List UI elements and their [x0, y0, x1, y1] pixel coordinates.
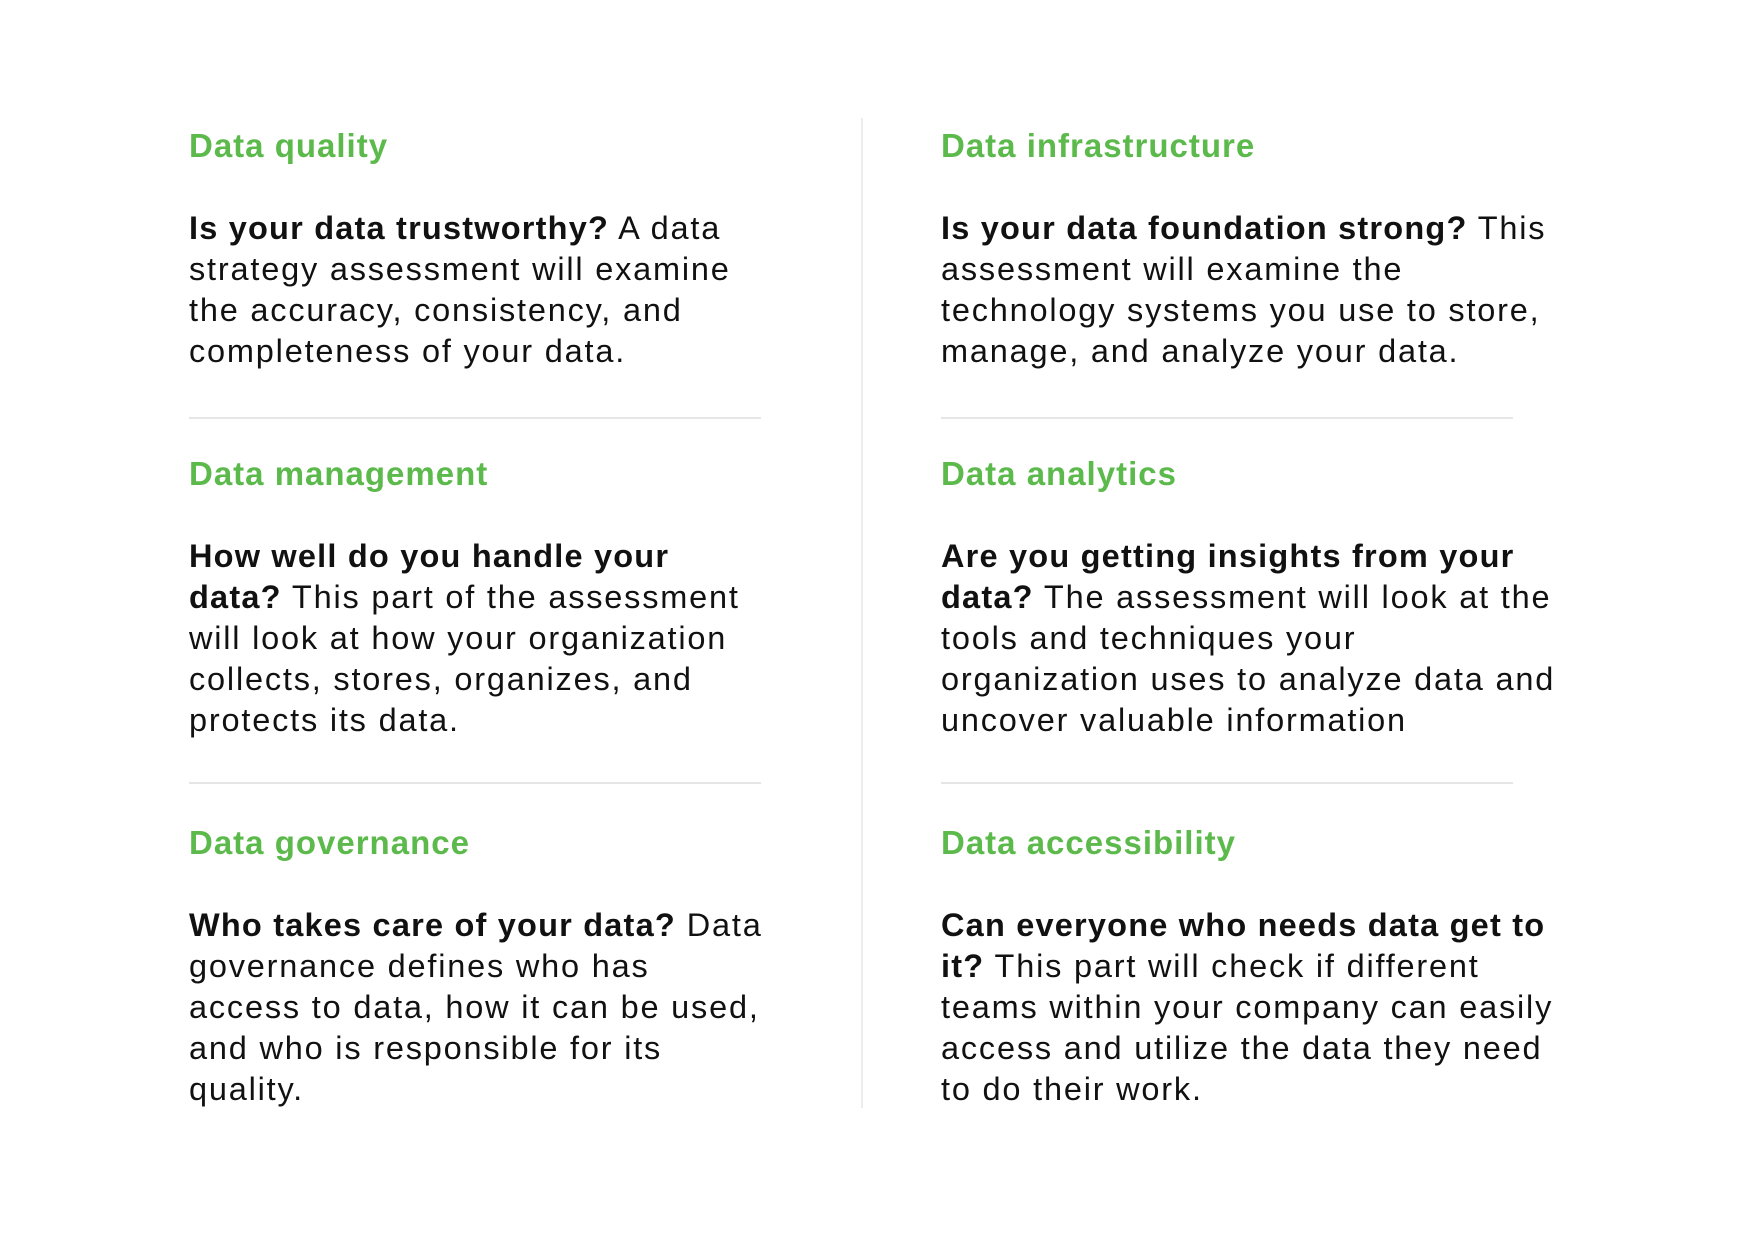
text: data accessibility: to do their work.	[941, 1071, 1203, 1107]
text: data quality: completeness of your data.	[189, 333, 626, 369]
text: data management: collects, stores, organizes, and	[189, 661, 693, 697]
text: data management: How well do you handle your	[189, 538, 669, 574]
text: data governance: quality.	[189, 1071, 304, 1107]
text: data management: protects its data.	[189, 702, 460, 738]
text: data quality	[189, 210, 731, 369]
text: data management: will look at how your organization	[189, 620, 727, 656]
panel: data analytics	[941, 455, 1555, 738]
text: data management: data? This part of the assessment	[189, 579, 740, 615]
panel: data quality	[189, 127, 731, 369]
heading: data management: Data management	[189, 455, 488, 492]
panel: data infrastructure	[941, 127, 1546, 369]
text: data infrastructure	[941, 210, 1546, 369]
heading: data infrastructure: Data infrastructure	[941, 127, 1255, 164]
heading: data governance: Data governance	[189, 824, 470, 861]
text: data accessibility	[941, 907, 1553, 1107]
text: data governance: access to data, how it can be used,	[189, 989, 760, 1025]
heading: data accessibility: Data accessibility	[941, 824, 1236, 861]
text: data analytics	[941, 538, 1555, 738]
text: data infrastructure: Is your data foundation strong? This	[941, 210, 1546, 246]
text: data governance	[189, 907, 763, 1107]
text: data accessibility: Can everyone who needs data get to	[941, 907, 1545, 943]
text: data quality: the accuracy, consistency, and	[189, 292, 683, 328]
text: data analytics: Are you getting insights from your	[941, 538, 1514, 574]
panel: data accessibility	[941, 824, 1553, 1107]
text: data governance: and who is responsible for its	[189, 1030, 662, 1066]
text: data analytics: data? The assessment will look at the	[941, 579, 1551, 615]
text: data governance: Who takes care of your data? Data	[189, 907, 763, 943]
panel: data management	[189, 455, 740, 738]
text: data analytics: uncover valuable information	[941, 702, 1407, 738]
heading: data analytics: Data analytics	[941, 455, 1177, 492]
text: data infrastructure: assessment will examine the	[941, 251, 1403, 287]
text: data accessibility: teams within your company can easily	[941, 989, 1553, 1025]
text: data analytics: organization uses to analyze data and	[941, 661, 1555, 697]
text: data accessibility: access and utilize the data they need	[941, 1030, 1542, 1066]
text: data management	[189, 538, 740, 738]
text: data quality: Is your data trustworthy? A data	[189, 210, 721, 246]
text: data analytics: tools and techniques your	[941, 620, 1356, 656]
heading: data quality: Data quality	[189, 127, 388, 164]
text: data infrastructure: technology systems you use to store,	[941, 292, 1541, 328]
text: data accessibility: it? This part will check if different	[941, 948, 1480, 984]
text: data infrastructure: manage, and analyze your data.	[941, 333, 1459, 369]
text: data governance: governance defines who has	[189, 948, 650, 984]
text: data quality: strategy assessment will examine	[189, 251, 731, 287]
panel: data governance	[189, 824, 763, 1107]
